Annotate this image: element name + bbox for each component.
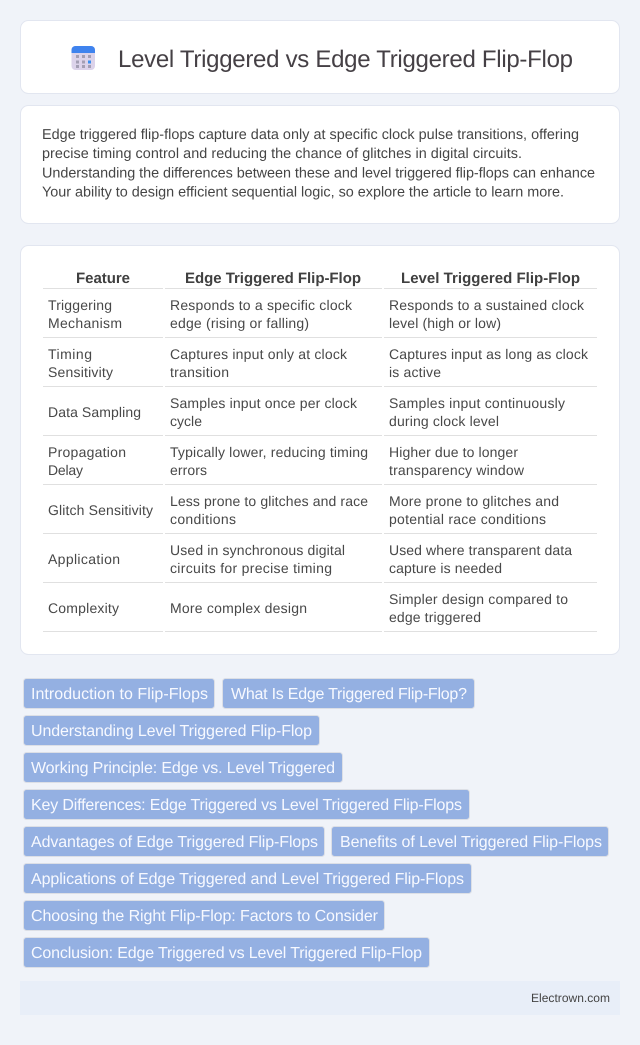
row: data sampling: during clock level <box>389 413 499 429</box>
row: timing sensitivity: Timing <box>48 346 92 362</box>
footer: Electrown.com <box>531 991 610 1005</box>
row: propagation delay: Propagation <box>48 444 126 460</box>
tag: applications <box>24 864 472 894</box>
tag: level triggered: Understanding Level Triggered Flip-Flop <box>31 723 312 740</box>
row: timing sensitivity: Sensitivity <box>48 364 113 380</box>
row: propagation delay: Typically lower, reducing timing <box>170 444 368 460</box>
tag: benefits: Benefits of Level Triggered Flip-Flops <box>340 834 602 851</box>
row: application: capture is needed <box>389 560 502 576</box>
row: triggering mechanism: Responds to a specific clock <box>170 297 353 313</box>
row: data sampling: Samples input continuously <box>389 395 565 411</box>
tag: introduction: Introduction to Flip-Flops <box>31 686 208 703</box>
row: complexity: edge triggered <box>389 609 481 625</box>
tag: level triggered <box>24 716 320 746</box>
title: Level Triggered vs Edge Triggered Flip-Flop <box>118 46 573 73</box>
row: propagation delay: Delay <box>48 462 83 478</box>
row: timing sensitivity: transition <box>170 364 229 380</box>
panel: intro text: Edge triggered flip-flops capture data only at specific clock pulse transitions, offering <box>42 127 579 143</box>
row: data sampling: cycle <box>170 413 202 429</box>
header panel <box>20 20 620 94</box>
row: glitch sensitivity: Less prone to glitches and race <box>170 493 368 509</box>
tag: choosing: Choosing the Right Flip-Flop: Factors to Consider <box>31 908 379 925</box>
row: triggering mechanism: edge (rising or falling) <box>170 315 309 331</box>
panel: intro text: precise timing control and reducing the chance of glitches in digital circuits. <box>42 146 522 162</box>
row: propagation delay: transparency window <box>389 462 525 478</box>
tag: edge triggered definition <box>222 678 474 708</box>
row: propagation delay: Higher due to longer <box>389 444 518 460</box>
row: timing sensitivity: is active <box>389 364 441 380</box>
panel: intro text: Your ability to design efficient sequential logic, so explore the article to learn more. <box>42 184 564 200</box>
table header <box>76 270 580 287</box>
table header: Feature <box>76 270 130 287</box>
panel: intro text <box>20 106 620 224</box>
footer <box>20 981 620 1015</box>
row: triggering mechanism: level (high or low) <box>389 315 501 331</box>
row: complexity: More complex design <box>170 600 307 616</box>
tag: conclusion <box>24 938 430 968</box>
row: triggering mechanism: Triggering <box>48 297 112 313</box>
tag: advantages: Advantages of Edge Triggered Flip-Flops <box>31 834 318 851</box>
panel: intro text: Understanding the differences between these and level triggered flip-flops can enhance <box>42 166 595 182</box>
topic tags <box>24 678 608 968</box>
row: data sampling: Samples input once per clock <box>170 395 358 411</box>
row: data sampling <box>48 395 565 429</box>
row: complexity: Simpler design compared to <box>389 591 568 607</box>
table header: Level Triggered Flip-Flop <box>401 270 580 287</box>
row: timing sensitivity <box>48 346 589 380</box>
row: application: Used where transparent data <box>389 542 572 558</box>
row: triggering mechanism <box>48 297 585 331</box>
tag: conclusion: Conclusion: Edge Triggered vs Level Triggered Flip-Flop <box>31 945 422 962</box>
row: application: Application <box>48 551 120 567</box>
table header: Edge Triggered Flip-Flop <box>185 270 361 287</box>
tag: choosing <box>24 900 384 930</box>
row: glitch sensitivity: More prone to glitches and <box>389 493 559 509</box>
tag: working principle: Working Principle: Edge vs. Level Triggered <box>31 760 335 777</box>
tag: applications: Applications of Edge Triggered and Level Triggered Flip-Flops <box>31 871 464 888</box>
row: timing sensitivity: Captures input as long as clock <box>389 346 589 362</box>
row: application: circuits for precise timing <box>170 560 332 576</box>
row: glitch sensitivity: Glitch Sensitivity <box>48 502 153 518</box>
row: propagation delay <box>48 444 525 478</box>
tag: edge triggered definition: What Is Edge Triggered Flip-Flop? <box>231 686 467 703</box>
row: triggering mechanism: Responds to a sustained clock <box>389 297 585 313</box>
row: glitch sensitivity <box>48 493 559 527</box>
row: glitch sensitivity: conditions <box>170 511 236 527</box>
row: propagation delay: errors <box>170 462 207 478</box>
tag: advantages <box>24 826 324 856</box>
tag: benefits <box>332 826 608 856</box>
row: timing sensitivity: Captures input only at clock <box>170 346 348 362</box>
row: glitch sensitivity: potential race conditions <box>389 511 546 527</box>
row: complexity: Complexity <box>48 600 119 616</box>
tag: introduction <box>24 678 214 708</box>
tag: working principle <box>24 752 342 782</box>
tag: key differences <box>24 790 470 820</box>
row: application <box>48 542 572 576</box>
icon: calendar <box>72 46 95 70</box>
row: data sampling: Data Sampling <box>48 404 141 420</box>
tag: key differences: Key Differences: Edge Triggered vs Level Triggered Flip-Flops <box>31 797 462 814</box>
row: triggering mechanism: Mechanism <box>48 315 122 331</box>
row: application: Used in synchronous digital <box>170 542 345 558</box>
panel: comparison table <box>20 246 620 654</box>
row: complexity <box>48 591 568 625</box>
